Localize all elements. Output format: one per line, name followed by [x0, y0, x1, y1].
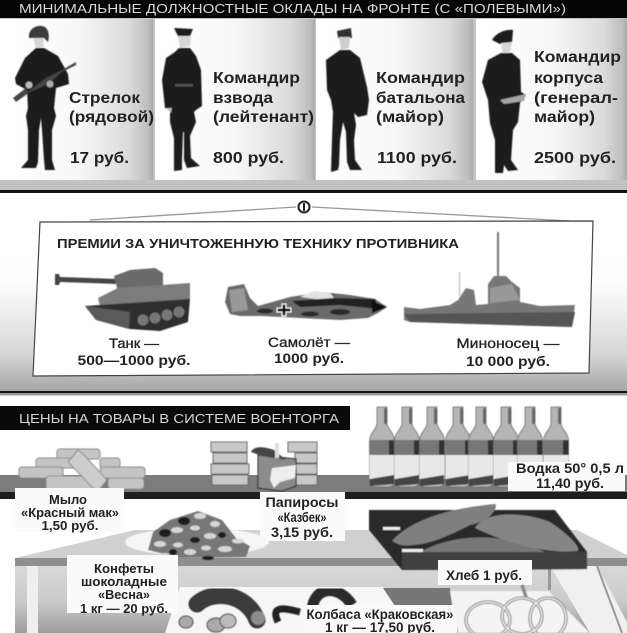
card: platoon commander: 800 руб.	[213, 150, 284, 167]
label: chocolates: 1 кг — 20 руб.	[80, 602, 168, 616]
icon: soap bars	[19, 449, 145, 491]
item: cigarettes	[211, 442, 345, 541]
bounty: tank: 500—1000 руб.	[78, 353, 190, 368]
panel: prices in army shops	[0, 393, 627, 633]
label: soap: «Красный мак»	[21, 506, 119, 520]
bounty: tank: Танк —	[109, 336, 160, 351]
item: sausage	[179, 591, 457, 633]
label: vodka	[508, 461, 625, 491]
card: corps commander: Командир	[534, 49, 621, 66]
label: sausage	[304, 605, 457, 633]
icon: open cigarette pack	[251, 443, 296, 491]
card: rifleman: (рядовой)	[69, 109, 154, 126]
card: rifleman: 17 руб.	[70, 150, 129, 167]
panel: minimum salaries	[0, 0, 627, 193]
icon: aircraft	[225, 284, 387, 320]
bounty: destroyer: 10 000 руб.	[466, 354, 550, 369]
card: battalion commander: батальона	[376, 90, 465, 107]
label: cigarettes: 3,15 руб.	[271, 525, 333, 540]
card: corps commander: (генерал-	[534, 90, 618, 107]
item: bread	[369, 504, 587, 585]
item: vodka	[370, 407, 625, 491]
heading bar: prices	[0, 406, 350, 430]
card: corps commander: майор)	[534, 109, 595, 126]
label: bread: Хлеб 1 руб.	[446, 568, 522, 583]
heading: bounties: ПРЕМИИ ЗА УНИЧТОЖЕННУЮ ТЕХНИКУ ПРОТИВНИКА	[57, 236, 460, 251]
label: cigarettes	[260, 492, 345, 541]
card: platoon commander: взвода	[213, 90, 273, 107]
item: soap	[15, 449, 145, 533]
label: soap: Мыло	[49, 493, 87, 507]
label: bread	[438, 560, 532, 585]
icon: Krakow sausage	[179, 591, 352, 632]
icon: tank	[55, 268, 190, 331]
panel: bounties for destroyed equipment	[0, 193, 627, 394]
card: battalion commander: 1100 руб.	[377, 150, 457, 167]
heading bar: prices: ЦЕНЫ НА ТОВАРЫ В СИСТЕМЕ ВОЕНТОРГА	[19, 412, 340, 426]
label: sausage: Колбаса «Краковская»	[306, 607, 454, 622]
label: chocolates: «Весна»	[98, 588, 150, 602]
heading bar: salaries	[0, 0, 627, 18]
label: chocolates: Конфеты	[94, 562, 154, 576]
label: vodka: Водка 50° 0,5 л	[516, 461, 624, 476]
sign board	[33, 221, 593, 376]
card: platoon commander: (лейтенант)	[213, 109, 314, 126]
item: chocolates	[67, 511, 269, 616]
card: rifleman	[0, 19, 154, 180]
icon: row of vodka bottles	[370, 407, 568, 487]
icon: pile of chocolates	[125, 511, 269, 560]
icon: cigarette packs stack	[211, 442, 317, 485]
label: soap	[15, 488, 124, 533]
icon: bread tray	[369, 504, 587, 570]
label: chocolates: шоколадные	[81, 575, 167, 589]
card: platoon commander: Командир	[213, 70, 300, 87]
upper shelf	[0, 475, 627, 499]
bounty: destroyer	[404, 232, 575, 369]
card: rifleman: Стрелок	[69, 90, 141, 107]
bounty: aircraft: Самолёт —	[268, 335, 351, 350]
label: soap: 1,50 руб.	[42, 519, 98, 533]
table with surface and legs	[15, 530, 627, 633]
card: battalion commander	[316, 19, 473, 180]
card: corps commander	[476, 19, 627, 180]
icon: rifleman figure	[13, 26, 76, 170]
label: chocolates	[67, 555, 178, 616]
label: cigarettes: «Казбек»	[278, 510, 326, 525]
card: corps commander: корпуса	[534, 70, 603, 87]
icon: destroyer	[404, 232, 575, 327]
bounty: tank	[55, 268, 190, 368]
card: corps commander: 2500 руб.	[534, 150, 616, 167]
card: battalion commander: Командир	[376, 70, 465, 87]
card: battalion commander: (майор)	[376, 109, 444, 126]
icon: general figure	[482, 30, 526, 173]
icon: lieutenant figure	[162, 28, 202, 171]
bounty: destroyer: Миноносец —	[456, 336, 560, 351]
icon: major figure	[326, 28, 369, 172]
item: bagels	[450, 585, 590, 633]
hanging sign pin and wires	[90, 202, 570, 221]
bounty: aircraft	[225, 284, 387, 366]
label: cigarettes: Папиросы	[266, 495, 338, 510]
heading bar: salaries: МИНИМАЛЬНЫЕ ДОЛЖНОСТНЫЕ ОКЛАДЫ НА ФРОНТЕ (С «ПОЛЕВЫМИ»)	[19, 1, 566, 16]
card: platoon commander	[155, 19, 315, 180]
label: vodka: 11,40 руб.	[536, 476, 604, 491]
bounty: aircraft: 1000 руб.	[274, 351, 344, 366]
